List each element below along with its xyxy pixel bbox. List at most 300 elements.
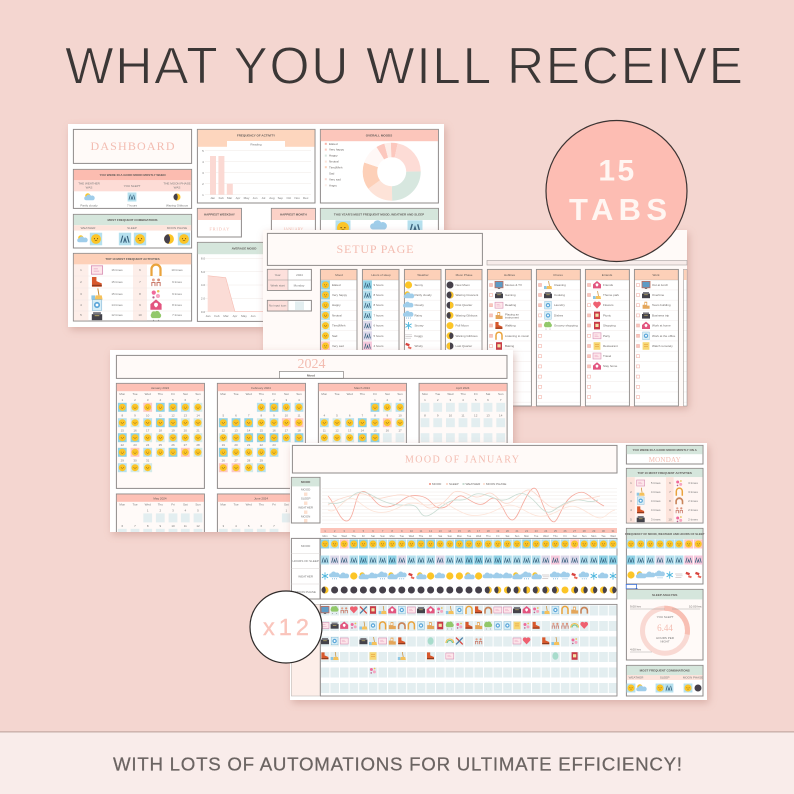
column: mood: Tired/Meh [332, 323, 346, 327]
settings: year and week start: Monday [294, 284, 305, 288]
mood dropdown [279, 371, 343, 378]
tracker row: moon phase [321, 586, 617, 594]
day header row: Wed [342, 534, 347, 538]
day header row: 28 [583, 529, 586, 533]
badge: times twelve: x12 [263, 614, 309, 640]
card: overall moods donut chart: Very happy [329, 148, 345, 152]
card: most frequent combinations of month: WEATHER [629, 676, 644, 680]
day header row: 16 [467, 529, 471, 533]
calendar: April 2024: 1 [424, 398, 426, 402]
column: moon phase: First Quarter [456, 303, 472, 307]
card: frequency of activity bar chart: Feb [219, 196, 224, 200]
calendar: January 2024: 9 [134, 414, 136, 418]
card: most frequent combinations of month: SLEEP [660, 676, 670, 680]
card: frequency of activity bar chart: Jan [210, 196, 215, 200]
title: WHAT YOU WILL RECEIVE [65, 36, 743, 94]
card: top 10 activities: 9 times [172, 280, 182, 284]
day header row: Fri [429, 534, 433, 538]
calendar: January 2024: 3 [147, 398, 149, 402]
calendar: March 2024: March 2024 [354, 386, 370, 390]
card: best weekday: MONDAY [649, 456, 681, 464]
column: mood: Sad [332, 334, 338, 338]
card: mood summary: WAS [174, 186, 180, 190]
day header row: Fri [496, 534, 500, 538]
chart key table: MOON [301, 514, 310, 518]
column: hobbies: Baking [505, 344, 515, 348]
calendar: January 2024: 29 [121, 458, 124, 462]
column: hobbies: Reading [505, 303, 517, 307]
day header row: 6 [372, 529, 374, 533]
card: top 10 activities of month: 6 [669, 481, 671, 485]
badge: 15 tabs [546, 120, 687, 262]
card: top 10 activities of month: 4 times [651, 508, 661, 512]
row labels: mood, sleep, weather, moon: MOOD [301, 544, 311, 548]
column: moon phase: Moon Phase [456, 273, 473, 277]
column: mood: Very sad [332, 344, 344, 348]
column: work [634, 269, 678, 406]
calendar: May 2024: 1 [147, 509, 149, 513]
day header row: Sat [438, 534, 442, 538]
calendar: January 2024: 20 [184, 428, 187, 432]
calendar: February 2024: 23 [272, 443, 276, 447]
row labels: mood, sleep, weather, moon [291, 538, 320, 599]
column: weather: Foggy [414, 334, 423, 338]
card: mood summary: WAS [86, 186, 92, 190]
column: errands: Stay home [603, 364, 618, 368]
calendar: March 2024: 6 [349, 414, 351, 418]
column: hours of sleep: Hours of sleep [371, 273, 391, 277]
column: hours of sleep: 7 hours [374, 313, 384, 317]
calendar: June 2024: 5 [248, 524, 250, 528]
calendar: May 2024: Fri [171, 503, 175, 507]
card: top 10 activities: 10 times [171, 268, 183, 272]
calendar: April 2024: 2 [437, 398, 439, 402]
card: mood summary: THE MOON PHASE [163, 182, 191, 186]
calendar: February 2024: Sun [296, 392, 302, 396]
card: frequency of activity bar chart: Mar [227, 196, 232, 200]
calendar: June 2024: 4 [235, 524, 237, 528]
column: moon phase: New Moon [456, 283, 470, 287]
card: most frequent combinations of month: MOON PHASE [683, 676, 703, 680]
calendar: April 2024: Thu [460, 392, 466, 396]
line chart: monthly trends: MOOD [432, 482, 442, 486]
card: mood summary [73, 169, 192, 208]
calendar: May 2024: 5 [197, 509, 199, 513]
day header row: 17 [477, 529, 481, 533]
calendar: April 2024 [418, 382, 508, 443]
day header row: 15 [458, 529, 461, 533]
column: weather: Partly cloudy [414, 293, 432, 297]
calendar: February 2024: 17 [285, 428, 288, 432]
calendar: February 2024: Sat [284, 392, 289, 396]
calendar: February 2024: 6 [235, 414, 237, 418]
card: sleep analysis donut: 10.00 hrs [689, 604, 702, 608]
column: mood: Neutral [332, 313, 342, 317]
column: errands: Shopping [603, 323, 616, 327]
day header row: 18 [487, 529, 490, 533]
column: work: Out at lunch [652, 283, 669, 287]
card: average mood line chart: 6.0 [201, 270, 205, 274]
card: average mood line chart: Mar [223, 314, 229, 318]
card: top 10 activities [73, 253, 192, 321]
column: weather: Windy [414, 344, 423, 348]
calendar: June 2024: Wed [246, 503, 252, 507]
day header row: Tue [601, 534, 606, 538]
card: mood summary: THE WEATHER [78, 182, 101, 186]
calendar: January 2024: 16 [133, 428, 137, 432]
column: moon phase: Waxing Crescent [456, 293, 478, 297]
line chart: monthly trends [322, 482, 617, 524]
line chart: monthly trends: SLEEP [449, 482, 459, 486]
day header row: 1 [324, 529, 326, 533]
calendar: March 2024: 1 [374, 398, 376, 402]
calendar: April 2024: Wed [447, 392, 454, 396]
card: frequency of activity bar chart: FREQUENCY OF ACTIVITY [237, 134, 275, 138]
column: moon phase: Full Moon [456, 323, 469, 327]
day header row: 9 [401, 529, 403, 533]
card: frequency of activity bar chart: Dec [303, 196, 309, 200]
card: average mood line chart: Apr [233, 314, 237, 318]
card: happiest weekday: FRIDAY [209, 226, 230, 232]
month heading: MOOD OF JANUARY [405, 454, 519, 466]
calendar: March 2024: Mon [321, 392, 328, 396]
calendar: January 2024: 11 [159, 414, 162, 418]
calendar: March 2024: 15 [373, 428, 377, 432]
calendar: February 2024: 14 [247, 428, 251, 432]
day header row: 14 [448, 529, 452, 533]
card: top 10 activities of month: TOP 10 MOST FREQUENT ACTIVITIES [638, 471, 692, 475]
calendar: April 2024: Mon [422, 392, 428, 396]
calendar: January 2024: 28 [196, 443, 200, 447]
calendar: January 2024: Thu [158, 392, 163, 396]
card: mood summary: 7 hours [127, 203, 137, 207]
calendar: April 2024: Tue [435, 392, 441, 396]
column: weather: Cloudy [414, 303, 424, 307]
column: hours of sleep: 8 hours [374, 303, 384, 307]
calendar: April 2024: 12 [474, 414, 478, 418]
calendar: May 2024: Thu [158, 503, 163, 507]
row labels: mood, sleep, weather, moon: MOON PHASE [296, 590, 316, 594]
card: top 10 activities: 9 [139, 303, 141, 307]
calendar: January 2024: 25 [159, 443, 162, 447]
calendar: March 2024: 13 [348, 428, 352, 432]
card: average mood line chart: Feb [214, 314, 220, 318]
day header row: Sat [505, 534, 510, 538]
calendar: February 2024: Fri [272, 392, 276, 396]
calendar: March 2024: Tue [334, 392, 340, 396]
card: sleep analysis donut: HOURS PER [656, 636, 675, 640]
calendar: February 2024: 7 [248, 414, 250, 418]
card: top 10 activities of month: 4 times [651, 490, 661, 494]
card: top 10 activities: 8 times [172, 303, 182, 307]
calendar: April 2024: 9 [437, 414, 439, 418]
calendar: May 2024: 8 [147, 524, 149, 528]
card: top 10 activities: 7 [139, 280, 141, 284]
column: hobbies: Walking [505, 323, 516, 327]
card: top 10 activities: 16 times [111, 268, 123, 272]
checkboxes [490, 284, 640, 398]
card: frequency of activity bar chart: Oct [286, 196, 291, 200]
calendar: April 2024: 13 [486, 414, 490, 418]
badge: 15 tabs: 15 [598, 155, 637, 188]
column: hobbies: Playing an [505, 312, 519, 316]
card: top 10 activities: TOP 10 MOST FREQUENT ACTIVITIES [105, 257, 160, 261]
card: average mood line chart: 4.0 [201, 283, 205, 287]
day header row: 7 [382, 529, 384, 533]
card: frequency of activity bar chart: Nov [295, 196, 300, 200]
card: frequency of activity bar chart: Aug [269, 196, 275, 200]
calendar: February 2024: 11 [297, 414, 301, 418]
day header row: Tue [332, 534, 337, 538]
calendar: March 2024: 2 [386, 398, 388, 402]
card: frequency of activity bar chart: Reading [250, 143, 262, 147]
column: moon phase: Waning Gibbous [456, 334, 478, 338]
card: best weekday [626, 445, 703, 464]
setup page heading: SETUP PAGE [336, 242, 414, 256]
card: happiest weekday: HAPPIEST WEEKDAY [204, 213, 235, 217]
calendar: February 2024: 5 [222, 414, 224, 418]
column: chores: Grocery shopping [554, 323, 578, 327]
card: top 10 activities of month: 9 [669, 508, 671, 512]
card: frequency of activity bar chart: Sep [278, 196, 283, 200]
column: hours of sleep: 6 hours [374, 323, 384, 327]
card: frequency of activity bar chart: Jul [261, 196, 266, 200]
calendar: February 2024: Mon [220, 392, 227, 396]
card: overall moods donut chart: OVERALL MOODS [366, 134, 392, 138]
column: work: Team building [652, 303, 671, 307]
day header row: Fri [362, 534, 365, 538]
card: most frequent combinations: WEATHER [81, 226, 96, 230]
calendar: April 2024: 5 [475, 398, 477, 402]
calendar: February 2024: 19 [222, 443, 225, 447]
badge: times twelve [250, 591, 322, 663]
card: top 10 activities: 6 [139, 268, 141, 272]
card: most frequent combinations of month [626, 665, 703, 696]
card: most frequent combinations: SLEEP [127, 226, 137, 230]
card: top 10 activities of month: 4 times [651, 499, 661, 503]
tracker row: hours of sleep [321, 556, 617, 564]
calendar: March 2024: 3 [399, 398, 401, 402]
card: mood summary: YOU SLEPT [124, 184, 141, 188]
day header row: Mon [390, 534, 395, 538]
day header row: 2 [334, 529, 336, 533]
calendar: February 2024: Thu [259, 392, 264, 396]
day header row: Wed [543, 534, 549, 538]
calendar: January 2024: 7 [197, 398, 199, 402]
column: errands: Picnic [603, 313, 612, 317]
card: top 10 activities of month: 3 [630, 499, 632, 503]
calendar: February 2024: 10 [285, 414, 288, 418]
card: frequency of activity bar chart: 5 [202, 149, 204, 153]
calendar: January 2024: 12 [171, 414, 175, 418]
calendar: May 2024: 7 [134, 524, 136, 528]
card: top 10 activities of month: 5 times [651, 481, 661, 485]
dashboard heading [73, 129, 192, 163]
day header row: 27 [573, 529, 577, 533]
day header row: Thu [553, 534, 558, 538]
calendar: January 2024: 24 [146, 443, 150, 447]
calendar: February 2024: 18 [297, 428, 301, 432]
calendar: May 2024 [116, 494, 205, 532]
card: happiest month [271, 208, 315, 237]
card: top 10 activities of month: 1 [630, 481, 632, 485]
calendar: March 2024: 11 [323, 428, 326, 432]
card: overall moods donut chart: Angry [329, 183, 337, 187]
day header row: Mon [457, 534, 462, 538]
calendar: March 2024: 8 [374, 414, 376, 418]
column: errands: Errands [602, 273, 613, 277]
calendar: May 2024: 2 [159, 509, 161, 513]
column: hobbies [487, 269, 531, 406]
column: mood: Very happy [332, 293, 348, 297]
tracker row: mood [320, 538, 617, 599]
card: happiest month: JANUARY [283, 226, 304, 232]
calendar: January 2024: Wed [145, 392, 151, 396]
card: top 10 activities of month: 3 times [688, 490, 698, 494]
column: hobbies: Hobbies [504, 273, 515, 277]
card: top 10 activities: 9 times [172, 292, 182, 296]
mood dropdown: Mood [307, 374, 315, 378]
card: top 10 activities: 3 [80, 292, 82, 296]
day header row: Tue [534, 534, 539, 538]
calendar: January 2024: 14 [196, 414, 200, 418]
calendar: January 2024: Sat [183, 392, 188, 396]
calendar: June 2024: Sun [296, 503, 302, 507]
card: top 10 activities: 2 [80, 280, 82, 284]
card: overall moods donut chart: Very sad [329, 177, 341, 181]
calendar: June 2024: 6 [260, 524, 262, 528]
column: chores: Laundry [554, 303, 565, 307]
calendar: February 2024: 2 [273, 398, 275, 402]
card: frequency by weekday [625, 528, 705, 584]
day header row: Wed [409, 534, 415, 538]
calendar: June 2024: Fri [272, 503, 276, 507]
card: average mood line chart: 0.0 [201, 310, 205, 314]
calendar: March 2024: Thu [360, 392, 365, 396]
calendar: January 2024: 17 [146, 428, 150, 432]
column: moon phase [445, 269, 482, 406]
card: top 10 activities: 7 times [172, 313, 182, 317]
calendar: May 2024: 9 [159, 524, 161, 528]
day header row: Mon [591, 534, 597, 538]
settings: year and week start [267, 269, 311, 290]
card: most frequent combinations: MOON PHASE [167, 226, 187, 230]
calendar: February 2024: 29 [260, 458, 263, 462]
day header row: 21 [515, 529, 519, 533]
calendar: April 2024: Sun [498, 392, 504, 396]
day header row: 5 [363, 529, 365, 533]
day header row: Sun [515, 534, 520, 538]
calendar: February 2024: February 2024 [251, 386, 271, 390]
calendar: April 2024: 11 [461, 414, 465, 418]
calendar: February 2024: Wed [246, 392, 252, 396]
column: hobbies: Listening to music [505, 334, 530, 338]
line chart: monthly trends: MOON PHASE [486, 482, 506, 486]
column: errands: Restaurant [603, 344, 618, 348]
day header row: Tue [467, 534, 472, 538]
year heading [116, 355, 507, 378]
card: top 10 activities of month: 3 times [651, 517, 661, 521]
calendar: January 2024: 27 [184, 443, 187, 447]
calendar: January 2024 [116, 383, 204, 488]
line chart: monthly trends: WEATHER [466, 482, 481, 486]
calendar: March 2024: 12 [335, 428, 339, 432]
card: overall moods donut chart: Neutral [329, 160, 339, 164]
column: chores: Dishes [554, 313, 564, 317]
column: errands: Party [603, 334, 611, 338]
day header row: 23 [535, 529, 538, 533]
day header row: 8 [391, 529, 393, 533]
calendar: February 2024: 4 [298, 398, 300, 402]
card: frequency of activity bar chart: 3 [202, 171, 204, 175]
calendar: May 2024: 12 [196, 524, 200, 528]
calendar: February 2024: 22 [260, 443, 263, 447]
column: errands [585, 269, 629, 406]
card: top 10 activities: 4 [80, 303, 82, 307]
calendar: June 2024: 7 [273, 524, 275, 528]
calendar: January 2024: Tue [132, 392, 138, 396]
card: top 10 activities of month: 7 [669, 490, 671, 494]
day header row: 20 [506, 529, 509, 533]
card: top 10 activities: 8 [139, 292, 141, 296]
setup page heading [267, 233, 482, 265]
card: sleep analysis donut: NIGHT [660, 640, 670, 644]
column: weather [403, 269, 441, 406]
column: work: Work at home [652, 323, 671, 327]
calendar: March 2024: 5 [336, 414, 338, 418]
day header row: Mon [322, 534, 328, 538]
calendar: June 2024: Thu [259, 503, 264, 507]
card: happiest weekday [197, 208, 241, 237]
calendar: April 2024: 6 [487, 398, 489, 402]
card: frequency of activity bar chart: 2 [202, 182, 204, 186]
card: top 10 activities of month: 4 [630, 508, 632, 512]
calendar: January 2024: 6 [184, 398, 186, 402]
day header row: 11 [420, 529, 423, 533]
column: work: Business trip [652, 313, 670, 317]
calendar: April 2024: 8 [424, 414, 426, 418]
column: moon phase: Waxing Gibbous [456, 313, 478, 317]
card: happiest month: HAPPIEST MONTH [280, 213, 307, 217]
day header row: 19 [496, 529, 500, 533]
calendar: March 2024: 10 [398, 414, 402, 418]
card: mood summary: Partly cloudy [80, 203, 98, 207]
calendar: May 2024: 6 [121, 524, 123, 528]
calendar: February 2024: 9 [273, 414, 275, 418]
chart key table: MOOD [301, 480, 311, 484]
calendar: June 2024: 2 [298, 509, 300, 513]
calendar: April 2024: Sat [486, 392, 490, 396]
calendar: June 2024: Mon [220, 503, 227, 507]
day header row: Sun [582, 534, 587, 538]
chart key table: WEATHER [298, 506, 314, 510]
calendar: January 2024: 13 [184, 414, 187, 418]
card: top 10 activities: 15 times [111, 280, 123, 284]
calendar: January 2024: 15 [121, 428, 124, 432]
calendar: March 2024: Fri [373, 392, 377, 396]
calendar: June 2024: Sat [284, 503, 289, 507]
calendar: March 2024: Sun [397, 392, 403, 396]
day header row: Thu [352, 534, 357, 538]
day header row: 29 [592, 529, 596, 533]
calendar: June 2024: June 2024 [254, 496, 268, 500]
column: weather: Sunny [414, 283, 424, 287]
card: most frequent combinations [73, 214, 192, 248]
calendar: March 2024: 14 [361, 428, 364, 432]
column: hours of sleep: 4 hours [374, 344, 384, 348]
card: mood summary: Waxing Gibbous [166, 203, 188, 207]
column: weather: Rainy [414, 313, 423, 317]
